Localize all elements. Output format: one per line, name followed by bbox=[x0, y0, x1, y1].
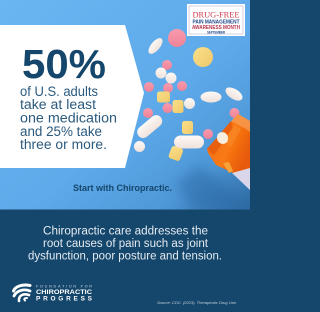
stat description bbox=[20, 84, 117, 152]
awareness month badge bbox=[187, 4, 245, 36]
awareness month badge: SEPTEMBER bbox=[207, 30, 225, 34]
pill bottle bbox=[207, 114, 250, 190]
logo mark bbox=[14, 285, 30, 301]
awareness month badge: DRUG-FREE bbox=[192, 10, 240, 20]
pills illustration bbox=[134, 29, 245, 162]
logo wordmark bbox=[36, 284, 93, 303]
awareness month badge: PAIN MANAGEMENT bbox=[192, 20, 240, 26]
footer message: Chiropractic care addresses the bbox=[43, 226, 208, 238]
stat description: one medication bbox=[20, 110, 117, 126]
footer message: dysfunction, poor posture and tension. bbox=[28, 250, 222, 262]
stat description: and 25% take bbox=[20, 124, 102, 139]
source citation: Source: CDC. (2023). Therapeutic Drug Use. bbox=[157, 301, 237, 305]
background photo area bbox=[0, 0, 250, 210]
statistic: 50%: 50% bbox=[22, 41, 106, 87]
logo wordmark: FOUNDATION FOR bbox=[36, 284, 92, 288]
logo wordmark: CHIROPRACTIC bbox=[36, 289, 92, 296]
stat description: take at least bbox=[20, 97, 96, 112]
stat description: of U.S. adults bbox=[20, 84, 98, 99]
logo: Foundation for Chiropractic Progress bbox=[14, 284, 93, 303]
logo wordmark: PROGRESS bbox=[36, 296, 93, 303]
bottle shadow bbox=[175, 165, 250, 210]
footer message: root causes of pain such as joint bbox=[43, 238, 209, 250]
footer band bbox=[0, 210, 250, 312]
white stat panel bbox=[0, 25, 144, 168]
tagline: Start with Chiropractic. bbox=[73, 183, 172, 193]
awareness month badge: AWARENESS MONTH bbox=[192, 25, 240, 31]
footer message bbox=[28, 226, 222, 262]
stat description: three or more. bbox=[20, 137, 107, 152]
